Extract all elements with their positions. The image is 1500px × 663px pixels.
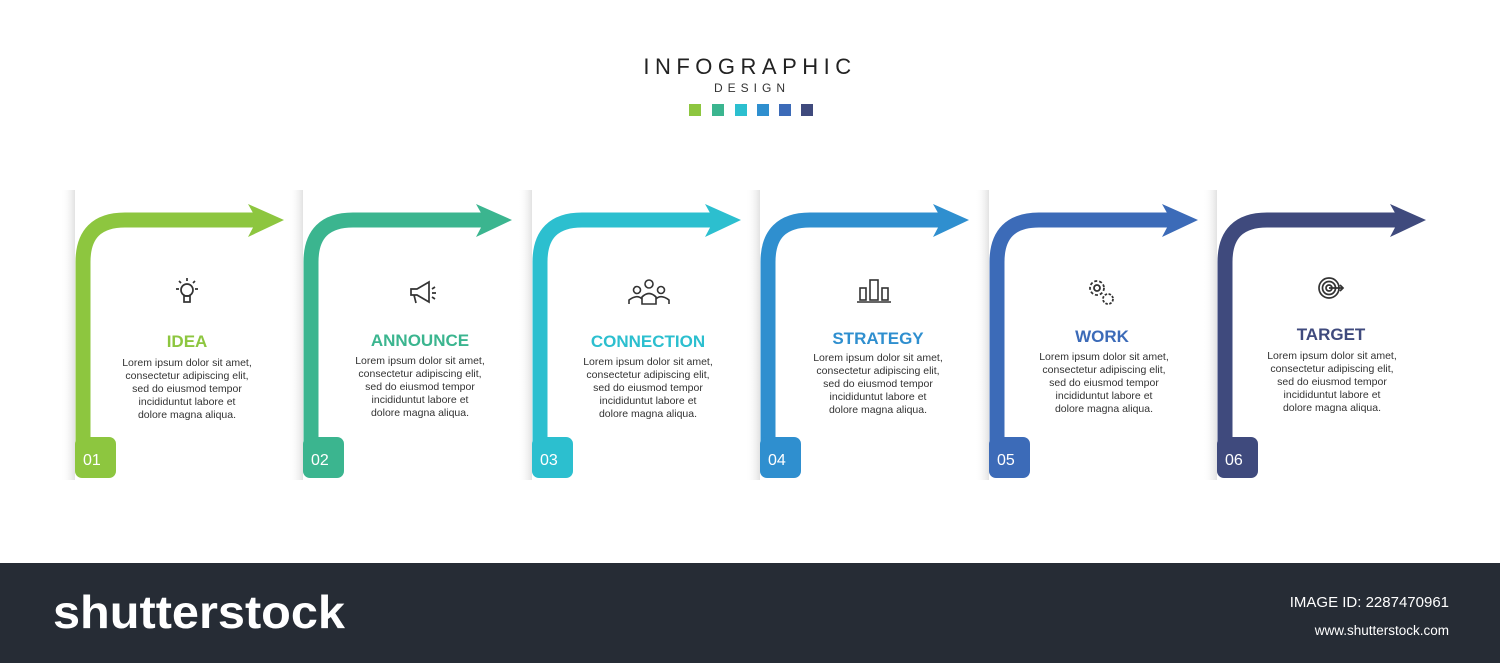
step 6: target: consectetur adipiscing elit,: [1270, 363, 1394, 375]
footer bar: [0, 563, 1500, 663]
icon: megaphone: [411, 282, 436, 303]
step 1: idea: [61, 190, 284, 480]
step 3: connection: consectetur adipiscing elit,: [586, 369, 710, 381]
step 3: connection: sed do eiusmod tempor: [593, 382, 703, 394]
color legend squares: [689, 104, 813, 116]
footer bar: www.shutterstock.com: [1314, 623, 1449, 638]
step 2: announce: [289, 190, 512, 480]
step 4: strategy: [746, 190, 969, 480]
step 4: strategy: Lorem ipsum dolor sit amet,: [813, 352, 943, 364]
step 2: announce: dolore magna aliqua.: [371, 407, 469, 419]
step 5: work: 05: [997, 452, 1015, 469]
step 3: connection: dolore magna aliqua.: [599, 408, 697, 420]
step 6: target: incididuntut labore et: [1284, 389, 1381, 401]
title: INFOGRAPHIC: [643, 54, 857, 79]
step 3: connection: Lorem ipsum dolor sit amet,: [583, 356, 713, 368]
step 1: idea: Lorem ipsum dolor sit amet,: [122, 357, 252, 369]
step 1: idea: sed do eiusmod tempor: [132, 383, 242, 395]
step 2: announce: Lorem ipsum dolor sit amet,: [355, 355, 485, 367]
step 5: work: dolore magna aliqua.: [1055, 403, 1153, 415]
title: DESIGN: [714, 81, 790, 95]
step 2: announce: incididuntut labore et: [372, 394, 469, 406]
icon: chess: [857, 280, 891, 302]
step 6: target: [1203, 190, 1426, 480]
step 4: strategy: dolore magna aliqua.: [829, 404, 927, 416]
footer bar: shutterstock: [53, 586, 345, 638]
step 5: work: WORK: [1075, 327, 1130, 346]
step 4: strategy: 04: [768, 452, 786, 469]
step 2: announce: sed do eiusmod tempor: [365, 381, 475, 393]
icon: target: [1319, 278, 1343, 298]
step 4: strategy: STRATEGY: [832, 329, 924, 348]
step 2: announce: consectetur adipiscing elit,: [358, 368, 482, 380]
icon: light bulb: [176, 278, 198, 302]
step 5: work: [975, 190, 1198, 480]
step 2: announce: ANNOUNCE: [371, 331, 469, 350]
step 6: target: dolore magna aliqua.: [1283, 402, 1381, 414]
step 5: work: consectetur adipiscing elit,: [1042, 364, 1166, 376]
step 6: target: TARGET: [1297, 325, 1366, 344]
step 1: idea: 01: [83, 452, 101, 469]
step 5: work: incididuntut labore et: [1056, 390, 1153, 402]
step 1: idea: consectetur adipiscing elit,: [125, 370, 249, 382]
title: [643, 54, 857, 95]
footer bar: IMAGE ID: 2287470961: [1290, 594, 1449, 611]
step 4: strategy: incididuntut labore et: [830, 391, 927, 403]
step 3: connection: CONNECTION: [591, 332, 705, 351]
icon: people: [629, 280, 669, 304]
step 5: work: sed do eiusmod tempor: [1049, 377, 1159, 389]
step 3: connection: 03: [540, 452, 558, 469]
step 1: idea: dolore magna aliqua.: [138, 409, 236, 421]
step 6: target: sed do eiusmod tempor: [1277, 376, 1387, 388]
step 4: strategy: consectetur adipiscing elit,: [816, 365, 940, 377]
icon: gears: [1090, 281, 1113, 304]
step 1: idea: incididuntut labore et: [139, 396, 236, 408]
step 3: connection: [518, 190, 741, 480]
step 5: work: Lorem ipsum dolor sit amet,: [1039, 351, 1169, 363]
step 3: connection: incididuntut labore et: [600, 395, 697, 407]
step 2: announce: 02: [311, 452, 329, 469]
step 6: target: Lorem ipsum dolor sit amet,: [1267, 350, 1397, 362]
step 4: strategy: sed do eiusmod tempor: [823, 378, 933, 390]
step 1: idea: IDEA: [167, 332, 207, 351]
step 6: target: 06: [1225, 452, 1243, 469]
